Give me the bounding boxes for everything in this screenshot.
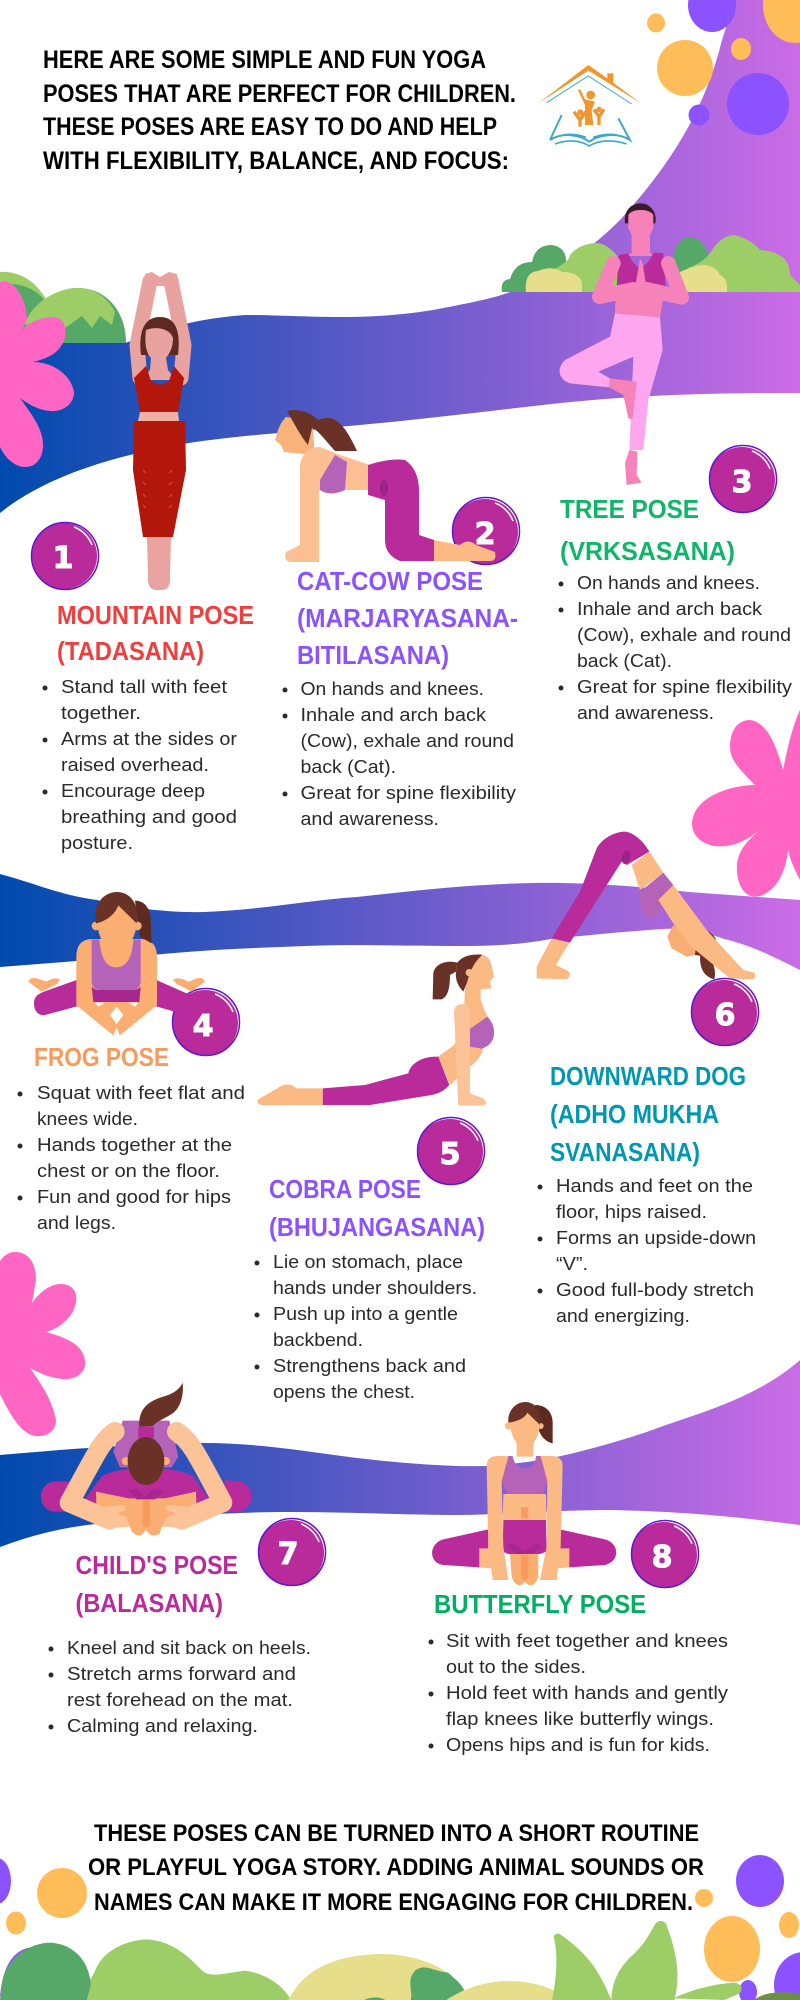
pose 7 heading [76, 1550, 238, 1618]
pose 4 list: knees wide. [37, 1108, 138, 1129]
pose 3: tree pose figure [560, 203, 682, 485]
closing text: OR PLAYFUL YOGA STORY. ADDING ANIMAL SOUNDS OR [88, 1854, 704, 1881]
pose 8 list: Hold feet with hands and gently [446, 1682, 729, 1703]
pose 6 heading: SVANASANA) [550, 1137, 700, 1167]
pose 6 list: Good full-body stretch [556, 1279, 754, 1300]
pose 2 heading [297, 566, 518, 670]
intro text: POSES THAT ARE PERFECT FOR CHILDREN. [43, 80, 516, 108]
badge 8: 8 [652, 1540, 672, 1575]
pose 3 list: Great for spine flexibility [577, 676, 793, 697]
pose 5 list: Push up into a gentle [273, 1303, 458, 1324]
pose 5 heading: COBRA POSE [269, 1174, 421, 1204]
flower: left top [0, 281, 74, 467]
left bushes [0, 272, 126, 343]
badge 4 [172, 988, 240, 1056]
badge 5 [417, 1118, 484, 1185]
pose 3 heading: TREE POSE [560, 494, 699, 524]
pose 8 list: out to the sides. [446, 1656, 586, 1677]
pose 8: butterfly pose figure [432, 1402, 616, 1585]
pose 3 list: Inhale and arch back [577, 598, 763, 619]
badge 5: 5 [440, 1137, 460, 1172]
pose 4 list: Hands together at the [37, 1134, 232, 1155]
pose 7 list: Stretch arms forward and [67, 1663, 296, 1684]
pose 5 list: Strengthens back and [273, 1355, 466, 1376]
pose 2 heading: CAT-COW POSE [297, 566, 483, 596]
pose 1: mountain pose figure [133, 272, 186, 590]
flower: left lower [0, 1252, 85, 1436]
pose 1 heading: (TADASANA) [57, 636, 204, 666]
pose 5 list: Lie on stomach, place [273, 1251, 463, 1272]
background wave 3 [0, 1360, 800, 1547]
pose 7 list: Calming and relaxing. [67, 1715, 258, 1736]
pose 2 list: back (Cat). [300, 756, 396, 777]
pose 2 heading: BITILASANA) [297, 640, 449, 670]
pose 4: frog pose figure [28, 892, 205, 1035]
pose 1 list: posture. [61, 832, 133, 853]
pose 6 heading: DOWNWARD DOG [550, 1061, 746, 1091]
pose 5 list [254, 1251, 477, 1402]
pose 2 list: and awareness. [300, 808, 439, 829]
pose 6 heading [550, 1061, 746, 1167]
bottom decorative dots [0, 1855, 800, 2000]
pose 4 list: and legs. [37, 1212, 116, 1233]
pose 5 list: hands under shoulders. [273, 1277, 477, 1298]
pose 6 list: Hands and feet on the [556, 1175, 753, 1196]
pose 2 list: On hands and knees. [300, 678, 484, 699]
pose 6 list [538, 1175, 756, 1326]
badge 7: 7 [278, 1537, 298, 1572]
badge 7 [258, 1518, 326, 1586]
pose 2 list: Great for spine flexibility [300, 782, 517, 803]
pose 8 heading: BUTTERFLY POSE [434, 1589, 646, 1619]
pose 7 list: rest forehead on the mat. [67, 1689, 293, 1710]
pose 6 list: floor, hips raised. [556, 1201, 707, 1222]
intro text: HERE ARE SOME SIMPLE AND FUN YOGA [43, 46, 486, 74]
pose 2 list: (Cow), exhale and round [300, 730, 514, 751]
pose 3 heading [560, 494, 735, 566]
pose 4 list: Fun and good for hips [37, 1186, 231, 1207]
pose 8 list [428, 1630, 729, 1755]
closing text [88, 1820, 704, 1916]
pose 4 list: Squat with feet flat and [37, 1082, 245, 1103]
pose 6 heading: (ADHO MUKHA [550, 1099, 719, 1129]
intro text: THESE POSES ARE EASY TO DO AND HELP [43, 113, 497, 141]
pose 1 list: raised overhead. [61, 754, 209, 775]
pose 8 list: Sit with feet together and knees [446, 1630, 728, 1651]
pose 3 list: (Cow), exhale and round [577, 624, 791, 645]
pose 6 list: and energizing. [556, 1305, 690, 1326]
pose 1 list [42, 676, 237, 853]
badge 6: 6 [715, 998, 735, 1033]
badge 3: 3 [732, 465, 752, 500]
pose 2 heading: (MARJARYASANA- [297, 603, 518, 633]
badge 6 [691, 978, 758, 1046]
badge 2 [452, 498, 520, 565]
pose 8 list: Opens hips and is fun for kids. [446, 1734, 710, 1755]
pose 1 list: breathing and good [61, 806, 237, 827]
icon: logo with house, family and open book [538, 65, 641, 146]
pose 2 list [282, 678, 517, 829]
pose 1 list: Arms at the sides or [61, 728, 237, 749]
pose 8 list: flap knees like butterfly wings. [446, 1708, 714, 1729]
decorative top-right dots [647, 0, 800, 135]
pose 7: child's pose figure [41, 1383, 252, 1536]
pose 7 heading: (BALASANA) [76, 1588, 223, 1618]
pose 5 list: opens the chest. [273, 1381, 415, 1402]
pose 7 list [48, 1637, 311, 1736]
pose 3 list: back (Cat). [577, 650, 672, 671]
pose 1 heading [57, 600, 254, 666]
pose 5: cobra pose figure [257, 954, 494, 1106]
closing text: THESE POSES CAN BE TURNED INTO A SHORT ROUTINE [94, 1820, 699, 1847]
pose 5 heading: (BHUJANGASANA) [269, 1212, 485, 1242]
badge 3 [709, 446, 776, 513]
pose 6 list: Forms an upside-down [556, 1227, 756, 1248]
pose 5 heading [269, 1174, 485, 1242]
background wave 2 [0, 874, 800, 970]
pose 7 list: Kneel and sit back on heels. [67, 1637, 311, 1658]
background wave 1 with top-right swoosh [0, 0, 800, 513]
pose 3 list: On hands and knees. [577, 572, 760, 593]
intro text [43, 46, 516, 175]
pose 3 list [558, 572, 793, 723]
pose 1 list: Stand tall with feet [61, 676, 227, 697]
pose 6 list: “V”. [556, 1253, 588, 1274]
pose 1 list: Encourage deep [61, 780, 205, 801]
flower: right middle [692, 710, 800, 897]
pose 3 list: and awareness. [577, 702, 714, 723]
badge 1: 1 [53, 541, 73, 576]
right bushes behind tree pose [502, 235, 800, 292]
pose 2 list: Inhale and arch back [300, 704, 487, 725]
intro text: WITH FLEXIBILITY, BALANCE, AND FOCUS: [43, 147, 509, 175]
pose 5 list: backbend. [273, 1329, 363, 1350]
pose 1 heading: MOUNTAIN POSE [57, 600, 254, 630]
pose 7 heading: CHILD'S POSE [76, 1550, 238, 1580]
pose 1 list: together. [61, 702, 141, 723]
pose 2: cat-cow figure [275, 410, 495, 562]
pose 4 list: chest or on the floor. [37, 1160, 220, 1181]
badge 8 [631, 1520, 698, 1588]
pose 4 list [18, 1082, 245, 1233]
pose 6: downward dog figure [537, 832, 755, 979]
badge 4: 4 [193, 1009, 213, 1044]
badge 1 [31, 522, 98, 590]
pose 4 heading: FROG POSE [34, 1042, 169, 1072]
badge 2: 2 [475, 517, 495, 552]
closing text: NAMES CAN MAKE IT MORE ENGAGING FOR CHILDREN. [94, 1889, 693, 1916]
pose 3 heading: (VRKSASANA) [560, 536, 735, 566]
bottom foliage [0, 1921, 800, 2000]
